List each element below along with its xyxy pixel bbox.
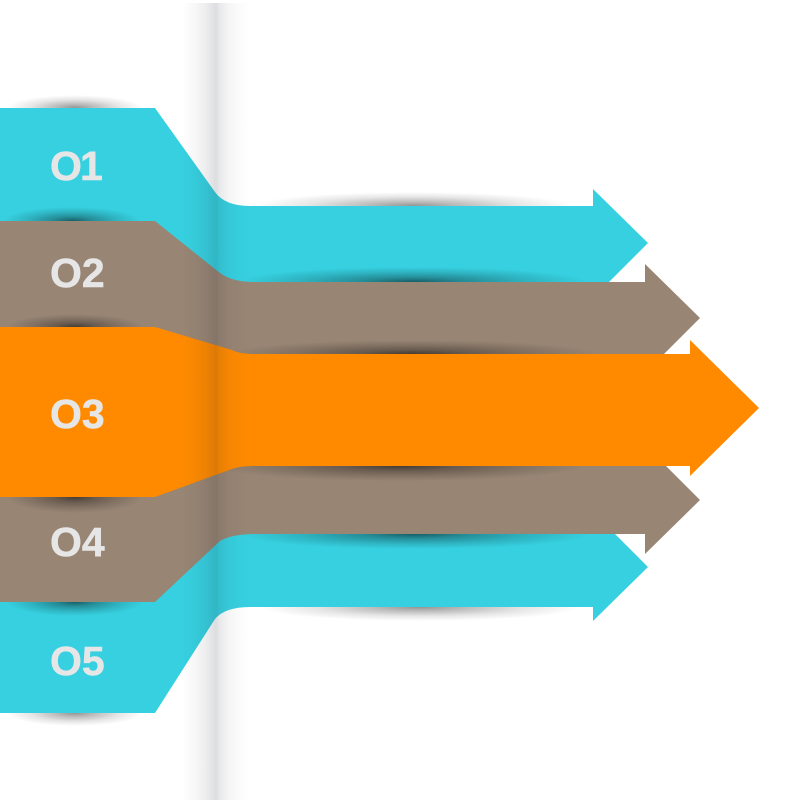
- label 03: O3: [50, 391, 105, 437]
- page fold shadow: [182, 3, 250, 800]
- shadows on taupe arrows: [7, 314, 598, 513]
- arrow 05 cyan: [0, 519, 648, 713]
- label 04: O4: [50, 519, 105, 565]
- label 02: O2: [50, 250, 105, 296]
- label 05: O5: [50, 638, 105, 684]
- shadows on white background: [7, 95, 580, 726]
- shadows on cyan arrows: [4, 207, 590, 616]
- label 01: 1: [80, 143, 103, 189]
- arrow 02 taupe: [0, 221, 700, 378]
- arrow 01 cyan: [0, 108, 648, 291]
- arrow 03 orange: [0, 327, 759, 497]
- label 01: O: [50, 143, 82, 189]
- arrow 04 taupe: [0, 440, 700, 602]
